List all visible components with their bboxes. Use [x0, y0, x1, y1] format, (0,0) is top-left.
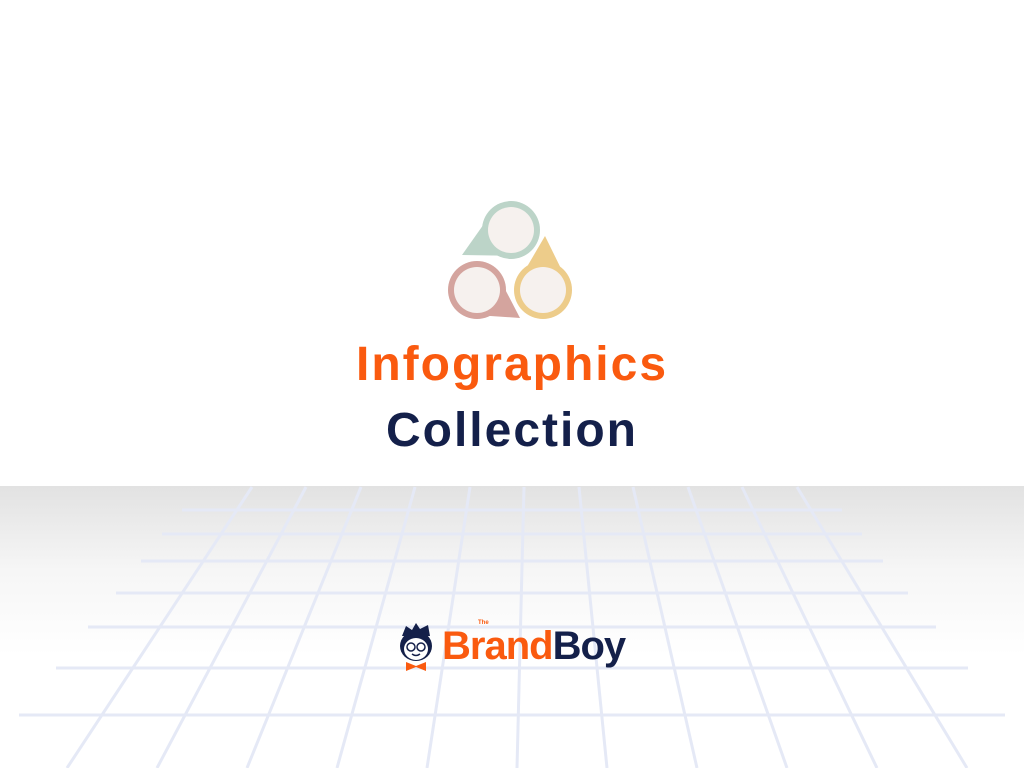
logo: The BrandBoy — [400, 620, 626, 671]
icon: boy mascot — [400, 623, 432, 671]
title: Infographics: Infographics — [356, 338, 668, 391]
text: The: The — [478, 620, 489, 626]
teardrop: red — [448, 261, 520, 319]
icon: three teardrop circles — [448, 201, 572, 319]
subtitle: Collection: Collection — [386, 404, 638, 457]
text: BrandBoy: BrandBoy — [442, 624, 625, 668]
teardrop: green — [462, 201, 540, 259]
teardrop: yellow — [514, 236, 572, 319]
